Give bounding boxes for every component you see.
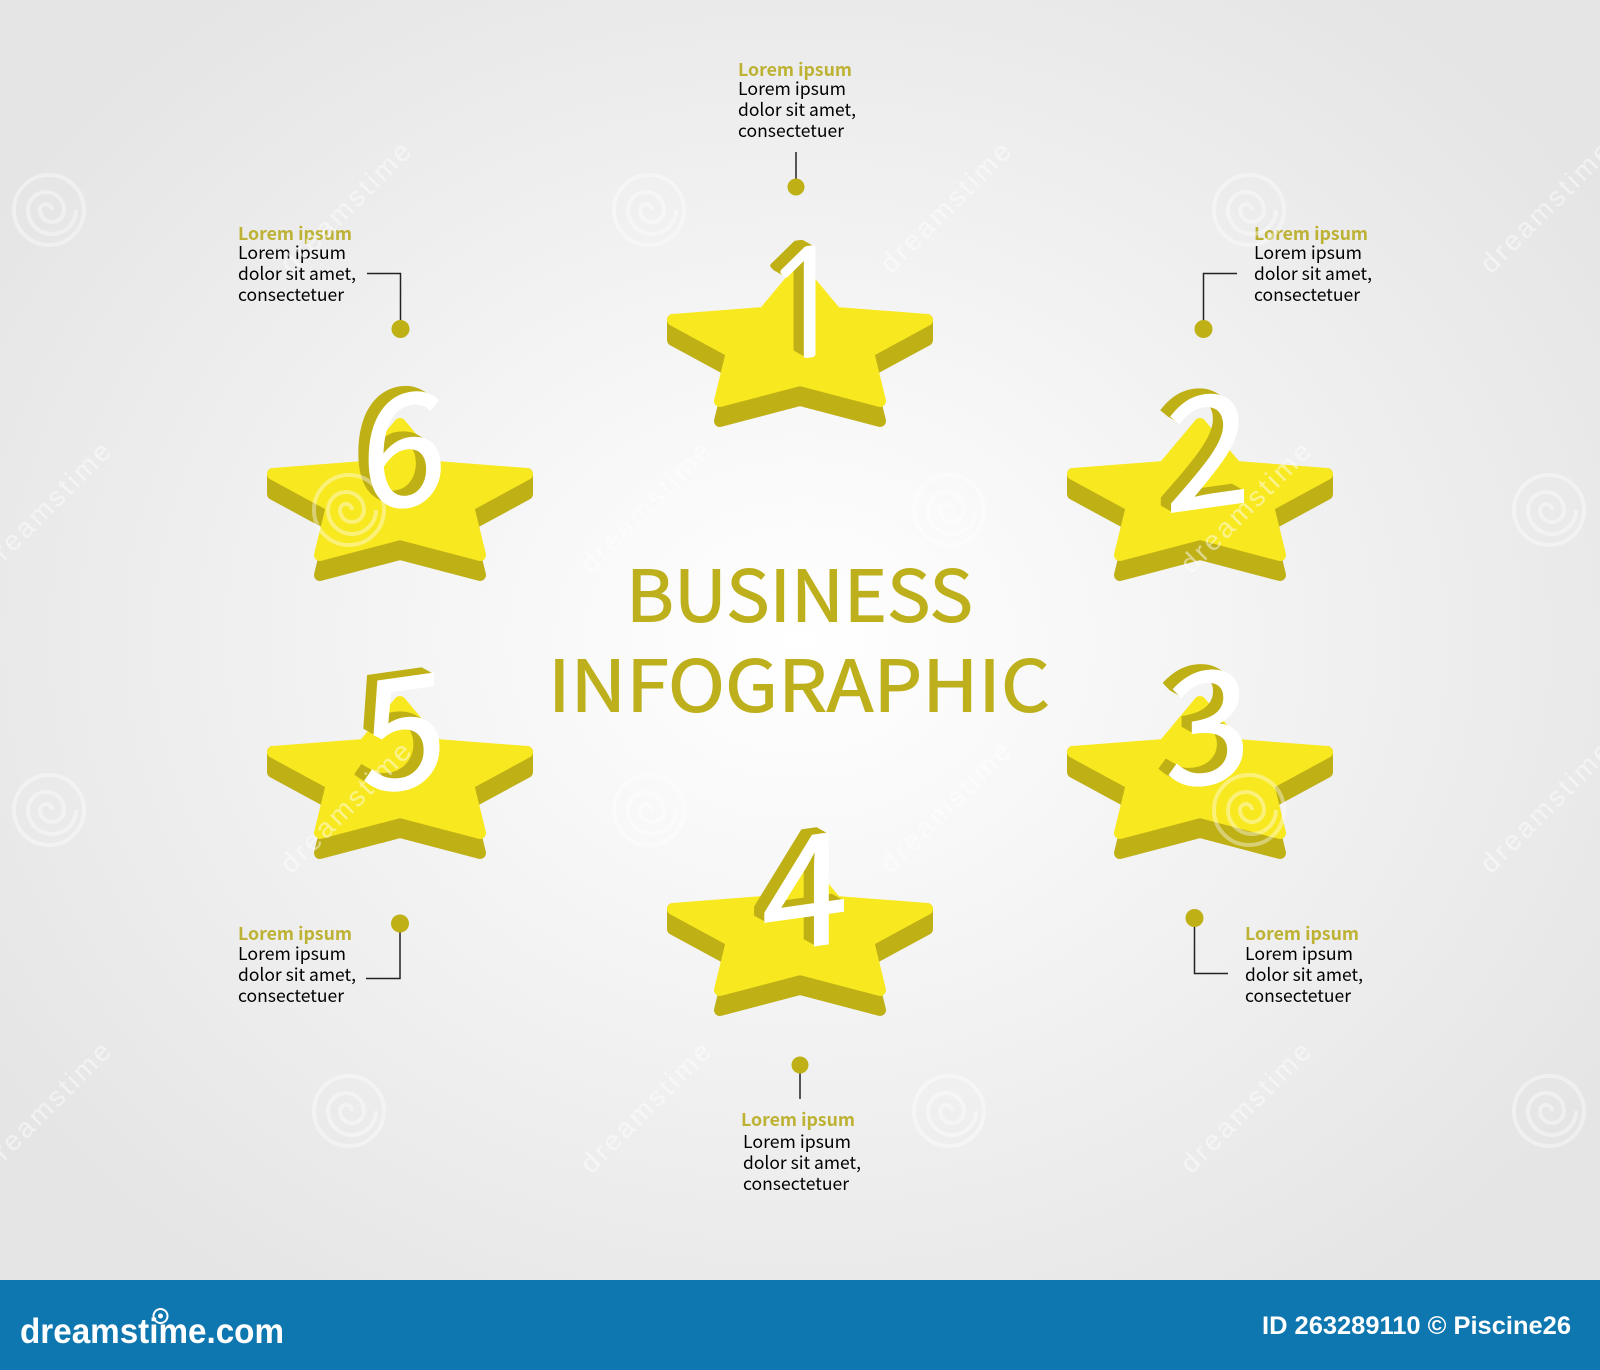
callout 1 xyxy=(738,57,856,196)
callout 4: dolor sit amet, xyxy=(743,1150,861,1175)
footer logo: dreamstime.com xyxy=(20,1312,284,1351)
callout 4 xyxy=(741,1056,861,1196)
star 2 xyxy=(1073,424,1327,575)
callout 3: Lorem ipsum xyxy=(1245,941,1353,966)
title xyxy=(548,540,1050,732)
callout 1: dolor sit amet, xyxy=(738,97,856,122)
callout 6: Lorem ipsum xyxy=(238,240,346,265)
callout 5 xyxy=(238,914,409,1008)
text: dreamstime xyxy=(574,1036,717,1179)
callout 6 xyxy=(238,221,410,338)
text: dreamstime xyxy=(874,736,1017,879)
callout 2 xyxy=(1194,221,1372,338)
number 6: 6 xyxy=(361,320,447,557)
callout 1: Lorem ipsum xyxy=(738,57,852,82)
callout 6: consectetuer xyxy=(238,282,344,307)
callout 1: consectetuer xyxy=(738,118,844,143)
number 2: 2 xyxy=(1165,321,1251,558)
callout 5: consectetuer xyxy=(238,983,344,1008)
callout 6: dolor sit amet, xyxy=(238,261,356,286)
text: dreamstime xyxy=(1174,1036,1317,1179)
callout 3: Lorem ipsum xyxy=(1245,921,1359,946)
title: BUSINESS xyxy=(626,540,973,642)
star 5 xyxy=(273,702,527,853)
callout 3: consectetuer xyxy=(1245,983,1351,1008)
text: dreamstime xyxy=(274,136,417,279)
text: dreamstime xyxy=(874,136,1017,279)
callout 5: Lorem ipsum xyxy=(238,921,352,946)
title: INFOGRAPHIC xyxy=(548,630,1050,732)
callout 1: Lorem ipsum xyxy=(738,76,846,101)
star 4 xyxy=(673,859,927,1010)
callout 5: dolor sit amet, xyxy=(238,962,356,987)
callout 4: Lorem ipsum xyxy=(741,1107,855,1132)
callout 4: Lorem ipsum xyxy=(743,1129,851,1154)
text: dreamstime xyxy=(1174,436,1317,579)
callout 3: dolor sit amet, xyxy=(1245,962,1363,987)
callout 2: Lorem ipsum xyxy=(1254,221,1368,246)
footer credit: ID 263289110 © Piscine26 xyxy=(1262,1312,1571,1340)
star 3 xyxy=(1073,702,1327,853)
star 6 xyxy=(273,424,527,575)
text: dreamstime xyxy=(574,436,717,579)
footer bar xyxy=(0,1280,1600,1370)
callout 3 xyxy=(1186,909,1363,1008)
callout 2: consectetuer xyxy=(1254,282,1360,307)
number 1: 1 xyxy=(760,225,850,385)
text: dreamstime xyxy=(274,736,417,879)
callout 4: consectetuer xyxy=(743,1171,849,1196)
number 3: 3 xyxy=(1165,597,1251,834)
star 1 xyxy=(673,270,927,421)
callout 2: dolor sit amet, xyxy=(1254,261,1372,286)
callout 5: Lorem ipsum xyxy=(238,941,346,966)
number 4: 4 xyxy=(762,761,848,998)
number 5: 5 xyxy=(361,602,447,839)
callout 2: Lorem ipsum xyxy=(1254,240,1362,265)
callout 6: Lorem ipsum xyxy=(238,221,352,246)
